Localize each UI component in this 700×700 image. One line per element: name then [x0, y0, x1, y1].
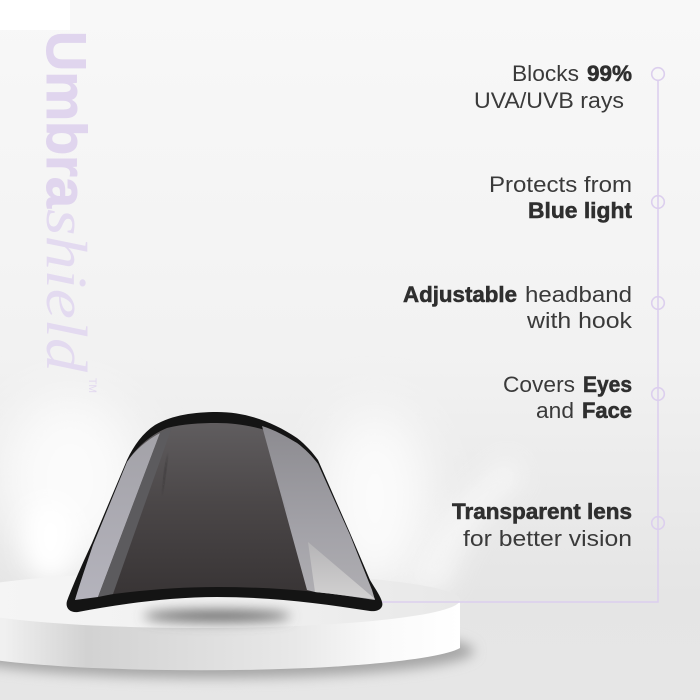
product: sun visor	[67, 412, 382, 612]
visor left reflection	[75, 433, 160, 600]
podium	[0, 572, 474, 678]
callout: blue light: Blue light	[528, 198, 633, 223]
callout: covers eyes and face: and	[536, 398, 574, 423]
callout: blocks UV: 99%	[587, 61, 632, 86]
callout: blocks UV: Blocks	[512, 61, 579, 86]
callout: transparent lens	[452, 499, 632, 551]
callout: covers eyes and face	[503, 372, 632, 423]
visor black rim	[67, 412, 382, 612]
callout: adjustable headband: with hook	[526, 308, 633, 333]
callout: blue light: Protects from	[489, 172, 632, 197]
callout: blue light	[489, 172, 633, 223]
callout: covers eyes and face: Face	[582, 398, 632, 423]
callout: transparent lens: for better vision	[463, 526, 632, 551]
callout: blocks UV	[474, 61, 632, 113]
visor right reflection	[262, 426, 375, 600]
callout: covers eyes and face: Eyes	[583, 372, 632, 397]
callout: adjustable headband: headband	[525, 282, 632, 307]
brand wordmark: Umbrashield	[34, 31, 99, 393]
callout: blocks UV: UVA/UVB rays	[474, 88, 624, 113]
callout: adjustable headband	[403, 282, 633, 333]
visor dark lens	[75, 423, 375, 600]
brand wordmark: Umbrashield: shield	[34, 209, 99, 373]
callout: adjustable headband: Adjustable	[403, 282, 517, 307]
brand wordmark: Umbrashield: TM	[86, 378, 98, 393]
brand wordmark: Umbrashield: Umbra	[35, 31, 98, 209]
callout: transparent lens: Transparent lens	[452, 499, 632, 524]
callout: covers eyes and face: Covers	[503, 372, 575, 397]
visor left transition band	[98, 427, 172, 597]
visor dark crease	[162, 452, 290, 520]
visor right highlight	[308, 542, 375, 599]
connector line with callout dots	[380, 68, 664, 602]
